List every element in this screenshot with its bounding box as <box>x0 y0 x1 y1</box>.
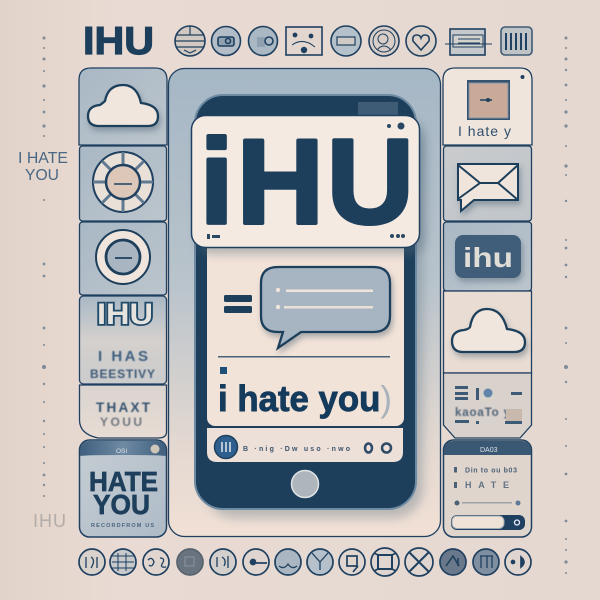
icon: face badge <box>275 549 301 575</box>
right dotted column <box>564 36 568 574</box>
phone bottom bar <box>207 428 403 462</box>
panel: IHU text tile <box>80 296 166 384</box>
tile header bar <box>444 441 531 455</box>
phone shadow <box>205 120 423 518</box>
phone screen <box>207 240 404 426</box>
side label: I HATE YOU <box>18 150 68 184</box>
phone body <box>195 95 416 509</box>
icon: dial <box>93 152 153 212</box>
title: IHU <box>83 20 154 63</box>
panel: ihu badge tile <box>444 222 532 291</box>
icon: filled glyph badge <box>440 549 466 575</box>
icon: framed square badge <box>371 548 399 576</box>
form lines <box>454 467 520 506</box>
side label: I HATE YOU: YOU <box>25 167 59 184</box>
icon: portrait badge <box>369 26 399 56</box>
panel: envelope tile <box>444 146 532 221</box>
panel: HATE YOU tile: OSI <box>116 448 127 455</box>
tile header bar <box>80 441 166 456</box>
icon: filled badge <box>177 549 203 575</box>
panel: second cloud tile <box>444 291 532 373</box>
tile word THAXT: THAXT <box>96 400 151 415</box>
icon: cup badge <box>307 549 333 575</box>
bottom bar dots <box>365 444 391 452</box>
bottom bar text: B ·nig ·Dw uso ·nwo <box>243 446 350 453</box>
panel: HATE YOU tile <box>80 440 166 537</box>
form lines: Din to ou b03 <box>465 468 517 474</box>
tile fine print: RECORDFROM US <box>91 523 154 529</box>
icon: heart badge <box>406 26 436 56</box>
phone speaker bar <box>358 102 398 118</box>
icon: glyph badge 2 <box>143 549 169 575</box>
form input and button <box>451 515 525 530</box>
side label: I HATE YOU: I HATE <box>18 150 68 167</box>
tile word HATE: HATE <box>89 466 158 497</box>
icon: glyph badge 1 <box>79 549 105 575</box>
panel: garbled text tile <box>444 373 532 438</box>
icon: second cloud <box>452 309 525 352</box>
tile glyph row <box>455 386 522 400</box>
icon: square badge <box>339 549 365 575</box>
left dotted column <box>42 36 46 497</box>
icon: filled bars badge <box>473 549 499 575</box>
icon: glyph badge 3 <box>210 549 236 575</box>
icon: sketch square <box>286 27 322 55</box>
tile lower dashes <box>455 409 522 424</box>
panel: form tile: DA03 <box>480 447 498 454</box>
panel: blurred text tile <box>80 385 166 438</box>
left column panels <box>79 68 167 537</box>
tile word IHU: IHU <box>97 298 153 331</box>
equals sign <box>224 295 252 313</box>
tile word YOUU: YOUU <box>100 415 142 429</box>
icon: two dots badge <box>505 549 531 575</box>
icon: camera badge <box>212 26 240 56</box>
panel: compass tile <box>80 222 166 295</box>
badge word ihu: ihu <box>463 242 513 273</box>
icon: lens badge <box>248 26 278 56</box>
icon: dash badge <box>243 549 269 575</box>
panel: dial tile <box>80 146 166 221</box>
card word iHU: i <box>200 115 233 249</box>
speech bubble <box>261 267 390 348</box>
panel: centre backing <box>168 68 440 536</box>
icon: grid badge <box>110 549 136 575</box>
tile word BEESTIVY: BEESTIVY <box>90 367 155 381</box>
icon: document rack <box>445 29 492 55</box>
divider <box>218 356 390 358</box>
top icon row <box>175 26 532 56</box>
icon: framed picture <box>467 80 510 120</box>
phone <box>195 95 423 518</box>
phrase: I hate you: i hate you) <box>218 378 392 419</box>
panel: framed picture tile <box>443 68 532 145</box>
icon: barcode square <box>501 27 532 55</box>
icon: cloud <box>88 85 158 126</box>
tile word YOU: YOU <box>93 489 150 520</box>
form lines: HATE <box>465 480 509 490</box>
icon: compass <box>96 230 150 284</box>
icon: striped globe <box>175 26 205 56</box>
home button <box>292 470 318 498</box>
faint IHU label: IHU <box>33 511 66 531</box>
icon: card badge <box>331 26 361 56</box>
tile word I HAS: I HAS <box>98 348 148 365</box>
card small marks <box>207 122 405 239</box>
top card: iHU <box>192 115 425 254</box>
bottom icon row <box>79 548 531 576</box>
pause button <box>214 436 238 458</box>
panel: form tile <box>444 440 532 537</box>
right column panels <box>443 68 532 537</box>
panel: cloud tile <box>79 68 167 145</box>
card word iHU: U <box>327 115 414 249</box>
tile word: kaoaTo y <box>455 407 511 419</box>
icon: envelope <box>458 164 518 211</box>
icon: ihu badge <box>455 235 521 278</box>
tile word I hate y: I hate y <box>458 123 511 139</box>
icon: crossed badge <box>405 548 433 576</box>
card word iHU: H <box>237 115 324 249</box>
